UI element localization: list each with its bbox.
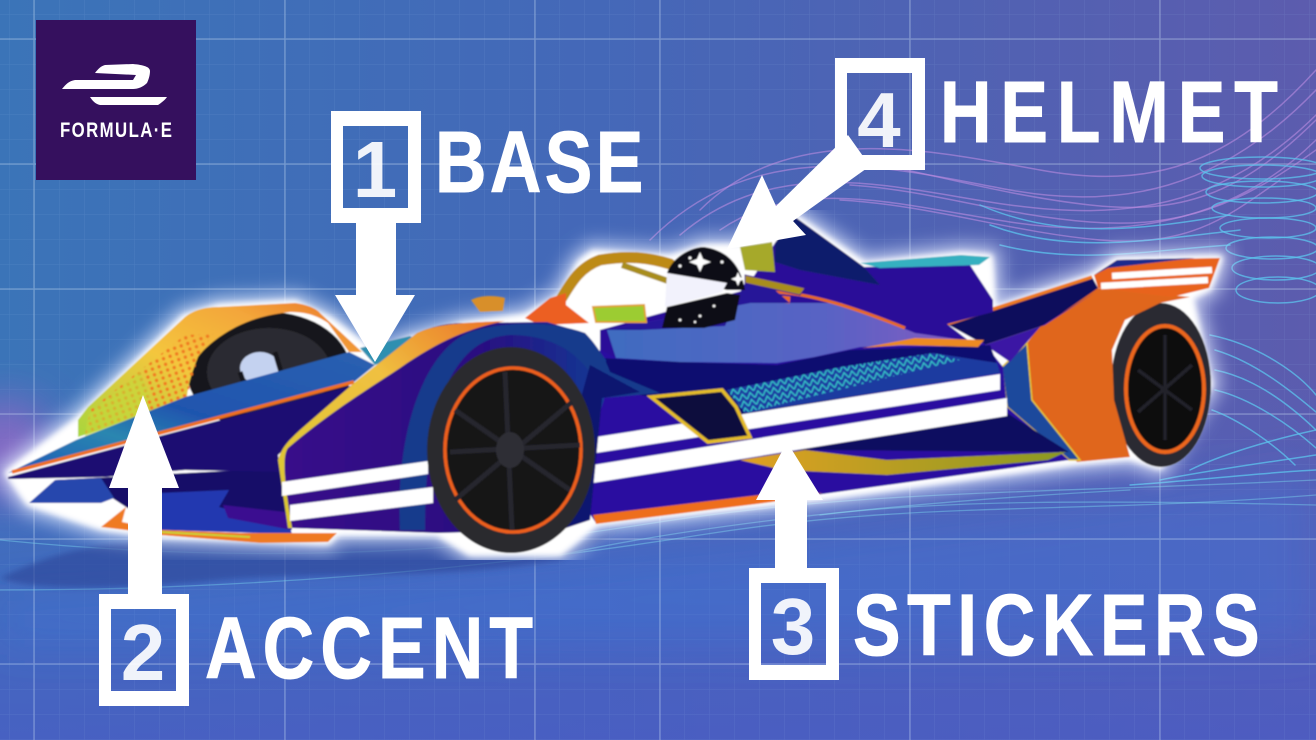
sticker stripes <box>593 374 1007 483</box>
front wheel <box>427 347 595 553</box>
label 3 stickers: STICKERS <box>853 576 1260 674</box>
arrow to accent <box>109 395 179 600</box>
label 3 stickers <box>749 568 1260 680</box>
engine cover and fin <box>600 217 1003 367</box>
helmet with stars <box>662 247 745 328</box>
scale pattern panel <box>727 353 1000 413</box>
under-nose backing <box>55 468 292 530</box>
car white glow <box>8 217 1220 553</box>
label 3 stickers: 3 <box>771 582 815 671</box>
wheel arch <box>399 324 660 530</box>
label 1 base: BASE <box>435 113 643 211</box>
main side body <box>560 343 1069 523</box>
halo <box>471 242 805 325</box>
arrow to base <box>335 218 415 362</box>
logo: Formula E: FORMULA·E <box>60 119 172 143</box>
side vent <box>651 390 750 442</box>
label 2 accent <box>99 594 533 706</box>
sidepod top <box>607 303 984 363</box>
logo: Formula E <box>36 20 196 180</box>
nose top <box>8 352 375 473</box>
arrow to helmet <box>727 135 870 249</box>
wing strut <box>947 277 1098 345</box>
rear wheel <box>1111 303 1211 467</box>
front stripes <box>282 461 433 521</box>
orange skirt <box>593 493 823 524</box>
arrow to stickers <box>756 442 823 574</box>
rear pod <box>1027 288 1190 462</box>
label 2 accent: 2 <box>121 608 165 697</box>
label 4 helmet: HELMET <box>940 63 1278 161</box>
label 4 helmet: 4 <box>857 76 901 164</box>
cockpit <box>607 283 790 330</box>
nose fairing <box>78 303 362 437</box>
front wing <box>29 478 337 543</box>
label 1 base: 1 <box>353 125 397 214</box>
rear wing <box>1094 258 1220 297</box>
far front wheel <box>187 312 351 432</box>
side panel <box>278 322 606 533</box>
label 4 helmet <box>835 58 1278 170</box>
label 1 base <box>331 111 643 223</box>
race car <box>8 217 1220 553</box>
nose underside <box>8 385 354 479</box>
gold underbody <box>780 413 1069 452</box>
airflow lines <box>0 70 1316 590</box>
blue side panel <box>1002 343 1080 460</box>
label 2 accent: ACCENT <box>205 599 533 697</box>
ground shadow <box>0 530 620 588</box>
